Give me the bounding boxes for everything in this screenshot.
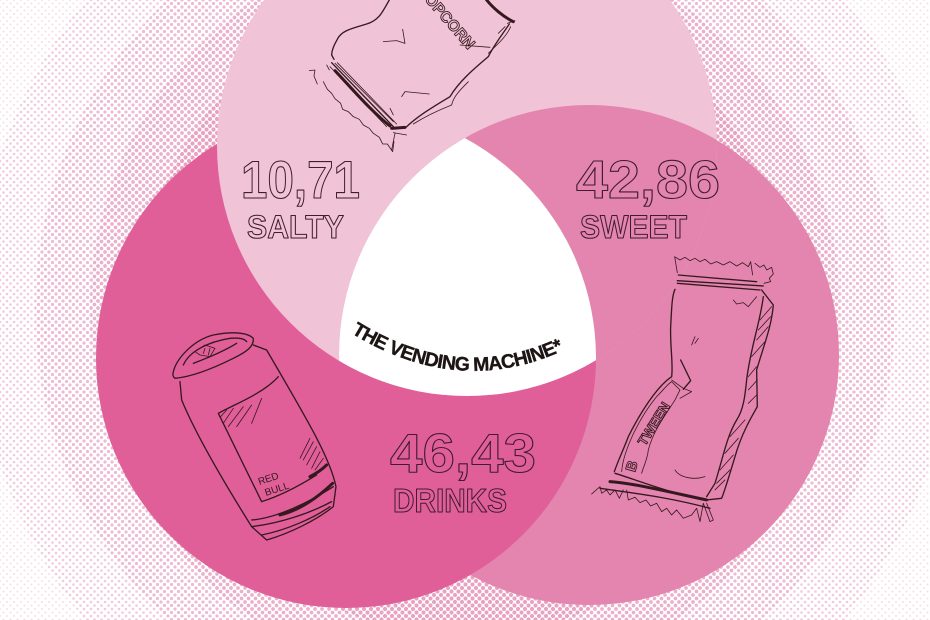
illustration: red bull can [173,333,336,540]
value: sweet 42,86: 42,86 [576,150,720,210]
illustration: bar wrapper [592,257,773,522]
illustration: popcorn bag [309,0,515,152]
label: sweet: SWEET [580,209,687,245]
illustration: bar wrapper: B [623,459,642,474]
value: drinks 46,43: 46,43 [390,422,536,484]
illustration: red bull can: RED [257,471,280,488]
illustration: red bull can: BULL [264,481,291,499]
title: the vending machine: THE VENDING MACHINE* [354,321,560,372]
label: drinks: DRINKS [393,482,507,519]
illustration: bar wrapper: TWEEN [635,399,673,448]
label: salty: SALTY [247,209,344,245]
value: salty 10,71: 10,71 [241,151,360,210]
venn diagram circles [96,0,839,608]
